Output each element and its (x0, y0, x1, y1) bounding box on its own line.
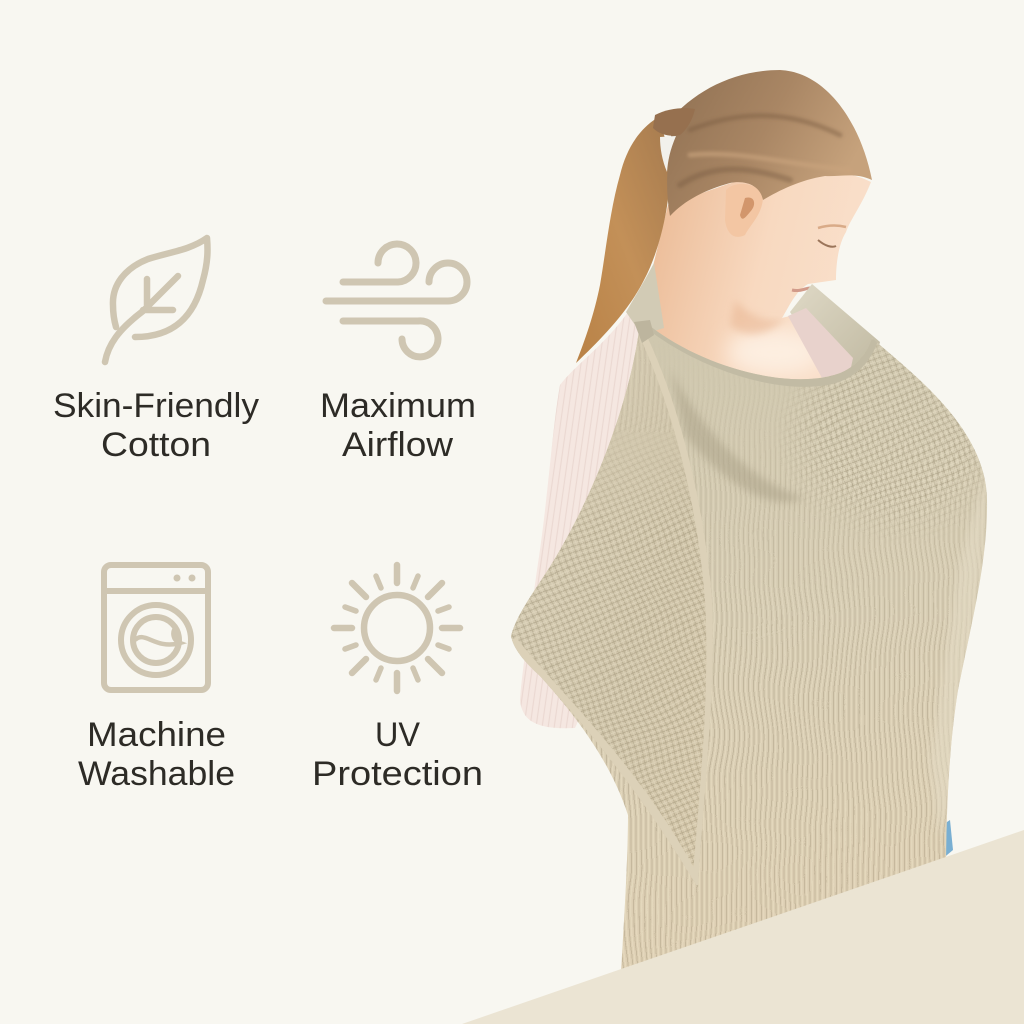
label: maximum airflow (320, 387, 476, 464)
photo: woman wearing nursing cover (511, 70, 987, 969)
label: skin-friendly cotton: Skin-Friendly (53, 387, 259, 425)
icon: sun (334, 565, 460, 691)
label: uv protection: UV (375, 716, 420, 754)
icon: leaf (105, 238, 208, 362)
cover flap (511, 334, 713, 888)
hair strands (680, 116, 850, 185)
cover main (511, 328, 987, 969)
label: machine washable: Washable (78, 755, 235, 793)
label: maximum airflow: Maximum (320, 387, 476, 425)
jeans hint (941, 820, 953, 860)
strap of top (788, 308, 853, 378)
icon: washing machine (104, 565, 208, 690)
jaw shadow (730, 300, 785, 334)
eye, nose and lips detail (792, 226, 846, 291)
ponytail gap (660, 136, 676, 172)
label: uv protection (312, 716, 483, 793)
label: machine washable: Machine (87, 716, 226, 754)
feature: uv protection (312, 565, 483, 793)
knot (634, 320, 654, 343)
neck hem (650, 326, 874, 383)
label: machine washable (78, 716, 235, 793)
flap hem (512, 325, 711, 885)
ear inner (740, 197, 754, 219)
neck, chest and face skin (640, 171, 871, 385)
bottom right beige wedge (462, 830, 1024, 1024)
label: skin-friendly cotton: Cotton (101, 426, 211, 464)
ponytail (576, 118, 670, 363)
icon: wind (326, 244, 467, 357)
feature: machine washable (78, 565, 235, 793)
feature: maximum airflow (320, 244, 476, 464)
sleeve (520, 312, 680, 728)
inner drape behind neck (790, 284, 880, 380)
label: maximum airflow: Airflow (342, 426, 453, 464)
right side highlight (930, 484, 986, 829)
hair (667, 70, 872, 216)
fold shadow (674, 382, 800, 504)
hair tie (653, 108, 695, 136)
feature: skin-friendly cotton (53, 238, 259, 464)
chest highlight (727, 328, 823, 376)
cover strap (626, 263, 664, 335)
ear (725, 184, 763, 237)
label: skin-friendly cotton (53, 387, 259, 464)
label: uv protection: Protection (312, 755, 483, 793)
